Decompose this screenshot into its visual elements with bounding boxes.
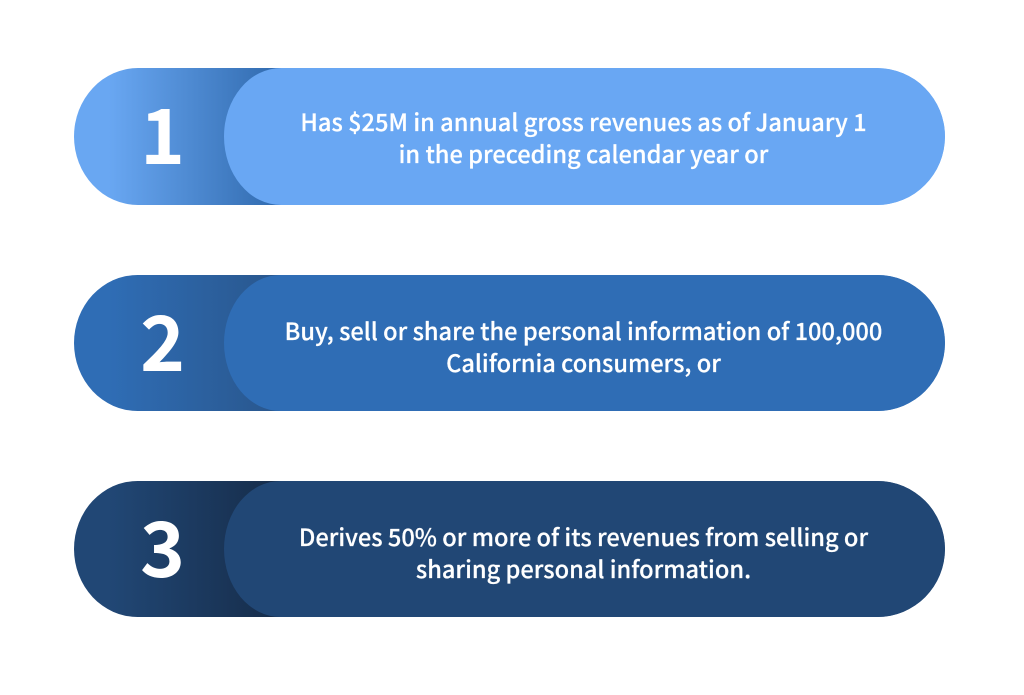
text panel: consumer data criterion	[224, 275, 945, 411]
number 3: 3	[140, 489, 185, 599]
text: revenue share criterion	[299, 519, 868, 585]
panel: criterion 2	[74, 275, 945, 411]
text: revenue criterion: Has $25M in annual gross revenues as of January 1	[300, 104, 867, 138]
number 2: 2	[140, 283, 185, 393]
text: consumer data criterion	[285, 313, 882, 379]
panel: criterion 3	[74, 481, 945, 617]
text: revenue share criterion: Derives 50% or more of its revenues from selling or	[299, 519, 868, 553]
text: revenue criterion: in the preceding calendar year or	[399, 136, 768, 170]
text: consumer data criterion: California consumers, or	[446, 345, 721, 379]
panel: criterion 1	[74, 68, 945, 205]
number 1: 1	[140, 76, 185, 186]
text panel: revenue share criterion	[224, 481, 945, 617]
text panel: revenue criterion	[224, 68, 945, 205]
text: consumer data criterion: Buy, sell or share the personal information of 100,000	[285, 313, 882, 347]
text: revenue criterion	[300, 104, 867, 170]
text: revenue share criterion: sharing personal information.	[416, 551, 751, 585]
